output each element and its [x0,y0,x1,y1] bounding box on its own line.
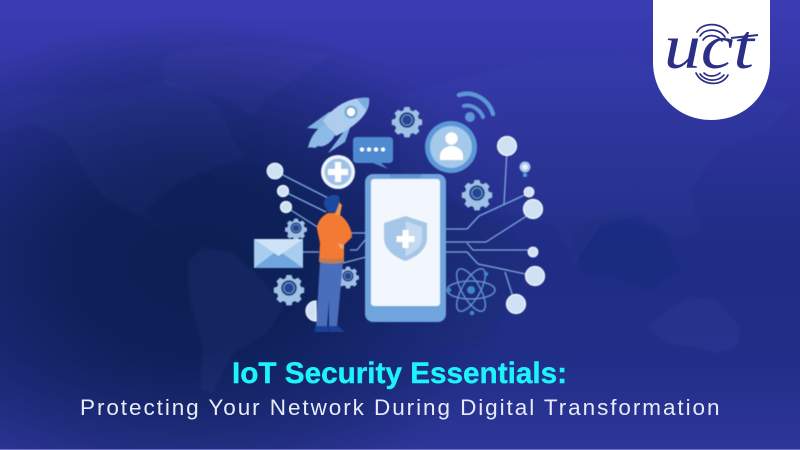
icon: atom [447,265,495,315]
network nodes [267,136,544,321]
icon: gear right [462,180,492,210]
logo crossbar [731,35,758,38]
icon: chat bubble [353,137,393,169]
logo signal arcs [696,25,728,83]
logo badge [653,0,770,120]
subtitle: Protecting Your Network During Digital Transformation [80,395,720,420]
icon: gear lower left [274,275,304,305]
map: north america [0,80,247,233]
icon: gear left [285,219,307,241]
circuit lines [275,150,535,300]
icon: gear top [392,107,422,137]
hand [338,243,344,249]
smartphone [365,174,446,322]
icon: gear behind person [337,267,359,289]
hair [324,195,340,212]
map: africa [375,205,530,345]
face [335,200,342,215]
illustration: IoT network around phone [254,94,544,332]
shoes [314,326,345,332]
legs [316,262,343,327]
icon: user profile circle [425,121,477,173]
map: eurasia [400,55,790,265]
icon: rocket [307,98,369,153]
person looking at phone [314,195,352,332]
icon: envelope [254,239,303,268]
map: australia [647,297,740,353]
icon: medical plus circle [321,155,355,189]
orange sweater [317,213,352,264]
icon: light bulb node [520,162,530,177]
icon: wifi signal [459,94,493,122]
map: south america [187,247,283,393]
bottom edge line [0,449,800,450]
map: greenland [163,45,333,117]
world map silhouette [0,45,790,393]
logo wordmark: uct [664,11,757,82]
icon: security shield [384,216,427,261]
title: IoT Security Essentials: [232,357,567,390]
map: south asia shade [565,215,680,290]
